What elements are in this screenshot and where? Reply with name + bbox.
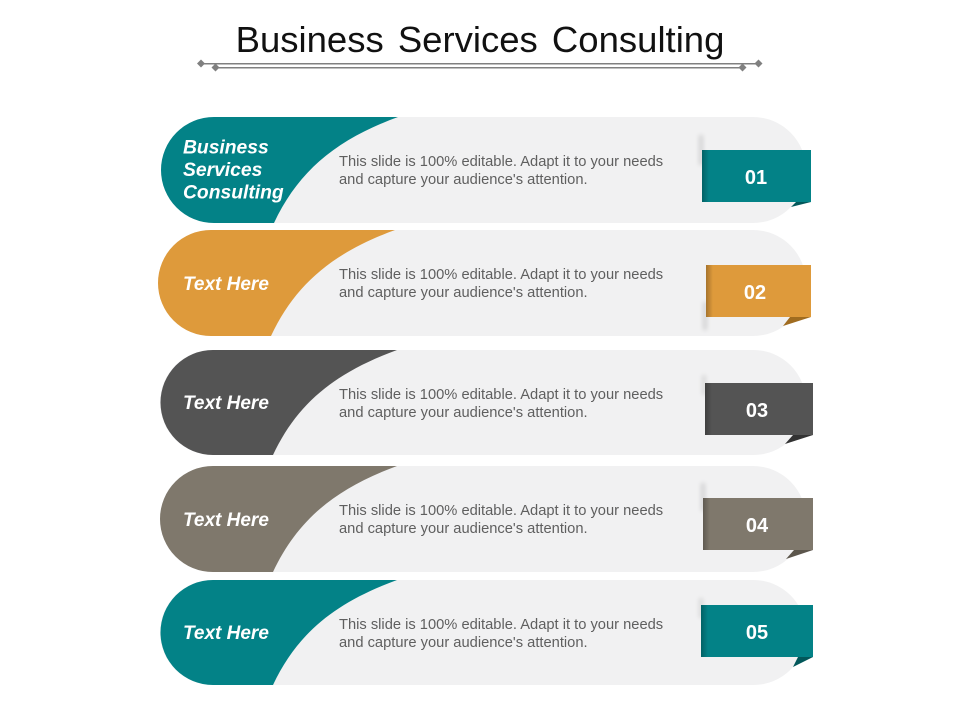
row 5 number tag: 05 (746, 622, 768, 644)
row 1 body text: This slide is 100% editable. Adapt it to your needs (339, 154, 663, 170)
row 3 number tag: 03 (746, 400, 768, 422)
row 2 body text: and capture your audience's attention. (339, 285, 588, 301)
row 2 background pill (158, 230, 806, 336)
row 4 number tag: 04 (746, 515, 769, 537)
row 2 body text: This slide is 100% editable. Adapt it to your needs (339, 267, 663, 283)
row 1 background pill (161, 117, 806, 223)
row 1 number tag (699, 135, 811, 207)
row 2 (158, 230, 811, 336)
row 2 coloured heading shape (158, 230, 395, 336)
row 2 heading: Text Here (183, 274, 269, 295)
row 1 body text: and capture your audience's attention. (339, 172, 588, 188)
row 3 coloured heading shape (161, 350, 397, 455)
row 4 number tag (701, 483, 813, 559)
row 3 background pill (160, 350, 806, 455)
row 4 body text: and capture your audience's attention. (339, 521, 588, 537)
row 5 body text: and capture your audience's attention. (339, 635, 588, 651)
row 5 body text: This slide is 100% editable. Adapt it to your needs (339, 617, 663, 633)
row 2 number tag: 02 (744, 282, 766, 304)
row 5 number tag (699, 598, 813, 667)
row 1 heading: Business (183, 138, 269, 158)
row 5 background pill (160, 580, 806, 685)
row 4 coloured heading shape (160, 466, 397, 572)
title divider ornament (197, 60, 762, 72)
row 4 heading: Text Here (183, 510, 269, 531)
row 3 body text: This slide is 100% editable. Adapt it to your needs (339, 387, 663, 403)
row 4 background pill (160, 466, 806, 572)
row 4 body text: This slide is 100% editable. Adapt it to your needs (339, 503, 663, 519)
row 5 (160, 580, 813, 685)
row 5 coloured heading shape (161, 580, 397, 685)
row 3 body text: and capture your audience's attention. (339, 405, 588, 421)
row 1 heading: Consulting (183, 182, 284, 204)
row 4 (160, 466, 813, 572)
row 3 (160, 350, 813, 455)
row 1 coloured heading shape (161, 117, 398, 223)
row 3 number tag (702, 375, 813, 444)
title: Business Services Consulting (236, 19, 724, 60)
row 3 heading: Text Here (183, 393, 269, 414)
row 1 (161, 117, 811, 223)
row 1 number tag: 01 (745, 167, 767, 189)
row 5 heading: Text Here (183, 623, 269, 644)
row 2 number tag (703, 265, 811, 330)
row 1 heading: Services (183, 160, 263, 181)
